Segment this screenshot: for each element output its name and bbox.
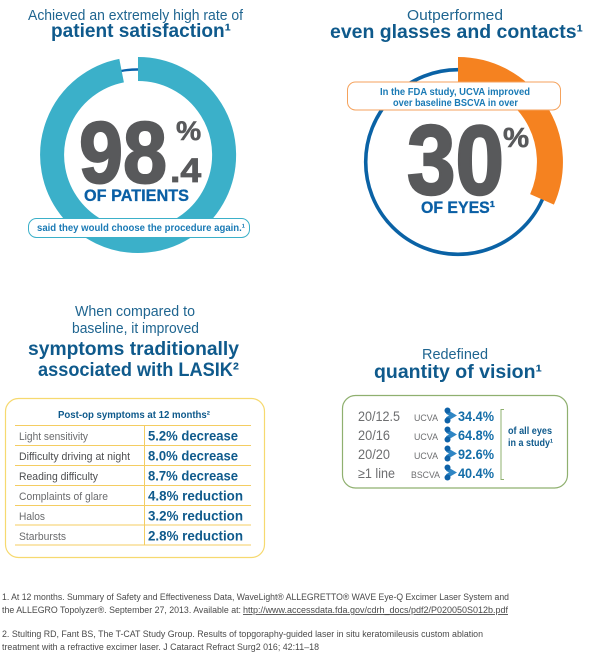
stat: 30%: 30 <box>407 105 504 215</box>
row: reading difficulty <box>19 468 238 484</box>
label: of patients: OF PATIENTS <box>84 187 189 205</box>
row: 20/12.5: 20/12.5 <box>358 409 400 424</box>
row: difficulty driving at night: 8.0% decrease <box>148 448 238 464</box>
row: halos: Halos <box>19 511 45 523</box>
heading: symptoms associated with LASIK: associated with LASIK² <box>38 360 239 381</box>
stat: 98.4%: .4 <box>170 152 201 190</box>
heading: glasses and contacts: Outperformed <box>407 7 503 24</box>
footnotes: 2. Stulting RD, Fant BS, The T-CAT Study Group. Results of topgoraphy-guided laser in situ keratomileusis custom ablation <box>2 629 483 639</box>
heading: patient satisfaction: patient satisfaction¹ <box>51 21 231 42</box>
row: starbursts: Starbursts <box>19 531 66 543</box>
footnotes: treatment with a refractive excimer laser. J Cataract Refract Surg2 016; 42:11–18 <box>2 642 319 652</box>
row: 20/12.5: UCVA <box>414 413 439 424</box>
table title: Post-op symptoms at 12 months² <box>58 409 210 421</box>
heading: patient satisfaction <box>28 7 244 42</box>
row: 20/12.5: 34.4% <box>458 409 494 424</box>
row: reading difficulty: Reading difficulty <box>19 471 98 483</box>
heading: symptoms associated with LASIK: When compared to <box>75 303 195 320</box>
note: of all eyes in a study: in a study¹ <box>508 438 554 449</box>
ring chart: 30% of eyes <box>348 70 560 254</box>
row: halos <box>19 508 243 524</box>
row: at least 1 line <box>358 464 494 481</box>
row: 20/20: 20/20 <box>358 447 390 462</box>
footnotes: the ALLEGRO Topolyzer®. September 27, 2013. Available at: <box>2 605 241 615</box>
panel: vision outcomes <box>342 396 568 488</box>
note: of all eyes in a study: of all eyes <box>508 426 552 437</box>
row: reading difficulty: 8.7% decrease <box>148 468 238 484</box>
row: light sensitivity <box>19 428 238 444</box>
heading: glasses and contacts <box>330 7 583 43</box>
row: at least 1 line: 40.4% <box>458 466 494 481</box>
row: 20/16 <box>358 426 494 443</box>
row: starbursts: 2.8% reduction <box>148 528 243 544</box>
footnotes: 1. At 12 months. Summary of Safety and Effectiveness Data, WaveLight® ALLEGRETTO® WAVE Eye-Q Excimer Laser System and <box>2 592 509 602</box>
donut chart: 98.4% of patients <box>28 69 250 241</box>
row: complaints of glare <box>19 488 243 504</box>
stat: 98.4%: % <box>176 116 201 146</box>
row: light sensitivity: 5.2% decrease <box>148 428 238 444</box>
row: complaints of glare: 4.8% reduction <box>148 488 243 504</box>
stat: 98.4%: 98 <box>79 104 167 201</box>
row: 20/16: 20/16 <box>358 428 390 443</box>
callout: FDA study: over baseline BSCVA in over <box>393 98 518 109</box>
heading: patient satisfaction: Achieved an extremely high rate of <box>28 7 244 24</box>
row: difficulty driving at night: Difficulty driving at night <box>19 451 130 463</box>
row: at least 1 line: ≥1 line <box>358 466 395 481</box>
callout: FDA study: In the FDA study, UCVA improved <box>380 87 530 98</box>
row: light sensitivity: Light sensitivity <box>19 431 88 443</box>
row: at least 1 line: BSCVA <box>411 470 441 481</box>
row: 20/16: UCVA <box>414 432 439 443</box>
stat: 30%: % <box>503 123 529 154</box>
heading: symptoms associated with LASIK <box>28 303 239 381</box>
icon: chevron <box>444 464 453 480</box>
callout: FDA study <box>348 82 560 110</box>
footnotes <box>2 592 509 652</box>
icon: chevron <box>444 446 453 462</box>
note: of all eyes in a study <box>508 426 554 449</box>
icon: chevron <box>444 408 453 424</box>
row: 20/20: 92.6% <box>458 447 494 462</box>
heading: quantity of vision: Redefined <box>422 346 488 363</box>
bracket <box>501 410 504 480</box>
row: starbursts <box>19 528 243 544</box>
heading: glasses and contacts: even glasses and contacts¹ <box>330 22 583 43</box>
row: halos: 3.2% reduction <box>148 508 243 524</box>
panel: post-op symptoms table <box>6 398 264 558</box>
row: 20/16: 64.8% <box>458 428 494 443</box>
footnotes: http://www.accessdata.fda.gov/cdrh_docs/pdf2/P020050S012b.pdf <box>243 605 509 615</box>
row: difficulty driving at night <box>19 448 238 464</box>
row: 20/12.5 <box>358 408 494 424</box>
heading: quantity of vision: quantity of vision¹ <box>374 362 542 383</box>
heading: symptoms associated with LASIK: symptoms traditionally <box>28 339 239 360</box>
icon: chevron <box>444 426 453 442</box>
row: 20/20 <box>358 446 494 462</box>
heading: quantity of vision <box>374 346 542 383</box>
row: complaints of glare: Complaints of glare <box>19 491 108 503</box>
row: 20/20: UCVA <box>414 451 439 462</box>
heading: symptoms associated with LASIK: baseline, it improved <box>72 320 199 337</box>
callout: choose the procedure again <box>28 218 250 238</box>
callout: choose the procedure again: said they would choose the procedure again.¹ <box>37 223 246 234</box>
label: of eyes: OF EYES¹ <box>421 199 495 217</box>
